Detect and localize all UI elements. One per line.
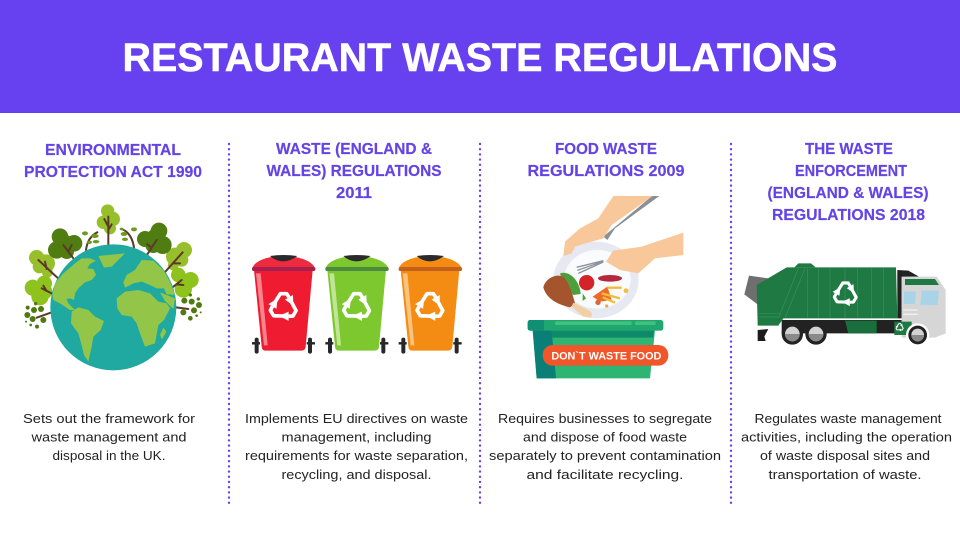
heading: Waste Regulations 2011: WASTE (ENGLAND & [276,141,432,158]
heading: Waste Enforcement Regulations: ENFORCEMENT [795,163,907,180]
icon: orange bin [399,255,462,354]
heading: Waste Regulations 2011: WALES) REGULATIONS [266,163,442,180]
text: Food Waste Regulations description: separately to prevent contamination [489,448,721,463]
icon: green bin [325,255,389,354]
header banner [0,0,960,113]
text: Waste Regulations description: requirements for waste separation, [245,448,468,463]
icon: three recycling bins [252,255,462,354]
heading: Waste Enforcement Regulations [768,141,928,224]
callout: don't waste food label [543,345,668,366]
heading: Environmental Protection Act [24,142,202,181]
text: Environmental Protection Act description [23,411,196,463]
heading: Waste Enforcement Regulations: THE WASTE [805,141,893,158]
text: Waste Enforcement description: of waste disposal sites and [760,448,930,463]
panel: Environmental Protection Act 1990 [23,142,202,463]
text: Waste Enforcement description: activities, including the operation [741,430,952,444]
heading: Food Waste Regulations: REGULATIONS 2009 [528,163,685,180]
icon: recycling truck [744,263,946,347]
heading: Food Waste Regulations [528,141,685,180]
text: Food Waste Regulations description [489,411,721,482]
text: Waste Regulations description: recycling, and disposal. [282,467,432,482]
text: Food Waste Regulations description: and facilitate recycling. [526,467,684,482]
text: Waste Enforcement description: transportation of waste. [768,467,922,482]
heading: Waste Enforcement Regulations: REGULATIONS 2018 [772,207,925,224]
text: Environmental Protection Act description: waste management and [30,430,186,444]
heading: Environmental Protection Act: ENVIRONMENTAL [45,142,181,159]
text: Waste Enforcement description [741,411,952,482]
icon: red bin [252,255,315,354]
heading: Waste Enforcement Regulations: (ENGLAND & WALES) [768,185,928,202]
panel: Food Waste Regulations 2009 [489,141,721,482]
panel: Waste Enforcement Regulations 2018 [741,141,952,482]
title: RESTAURANT WASTE REGULATIONS [122,36,838,80]
callout: don't waste food label: DON`T WASTE FOOD [551,350,661,362]
text: Food Waste Regulations description: Requires businesses to segregate [498,411,712,426]
heading: Waste Regulations 2011: 2011 [336,185,372,202]
text: Waste Regulations description: Implements EU directives on waste [245,411,468,426]
text: Environmental Protection Act description: disposal in the UK. [52,448,166,463]
text: Food Waste Regulations description: and dispose of food waste [523,430,687,444]
icon: plate scraped into food bin [528,196,683,378]
text: Waste Enforcement description: Regulates waste management [754,411,942,426]
text: Environmental Protection Act description: Sets out the framework for [23,411,196,426]
icon: earth with trees [24,204,202,370]
heading: Environmental Protection Act: PROTECTION ACT 1990 [24,164,202,181]
panel: Waste Regulations 2011 [245,141,468,482]
heading: Waste Regulations 2011 [266,141,442,202]
heading: Food Waste Regulations: FOOD WASTE [555,141,657,158]
text: Waste Regulations description: management, including [282,430,432,444]
text: Waste Regulations description [245,411,468,482]
